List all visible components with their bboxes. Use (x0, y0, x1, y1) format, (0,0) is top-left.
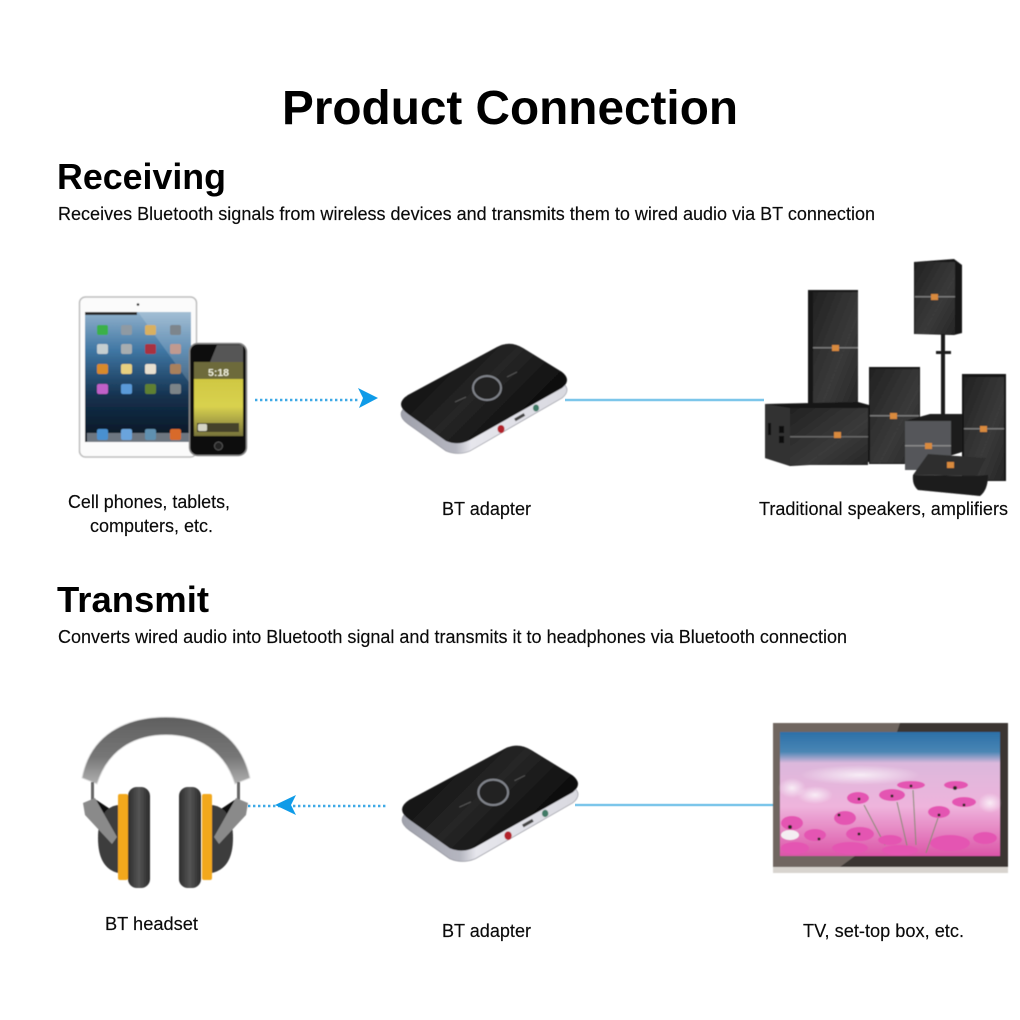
line: wired connection to speakers (565, 399, 764, 401)
left ear cup (83, 787, 150, 888)
arrow: dotted Bluetooth link to adapter (255, 388, 378, 408)
tall speaker left (808, 290, 858, 406)
text: transmit description: Converts wired audio into Bluetooth signal and transmits it to headphones via Bluetooth connection (58, 627, 847, 647)
text: receiving description: Receives Bluetooth signals from wireless devices and transmits them to wired audio via BT connection (58, 204, 875, 224)
label: BT adapter transmit: BT adapter (442, 921, 531, 941)
heading: Receiving: Receiving (57, 156, 226, 197)
icon: tablet and phone (80, 297, 246, 457)
label: speakers: Traditional speakers, amplifiers (759, 499, 1008, 519)
right ear cup (179, 787, 248, 888)
icon: speakers (765, 259, 1006, 496)
headband (82, 717, 250, 784)
label: TV: TV, set-top box, etc. (803, 921, 964, 941)
phone (190, 344, 246, 456)
icon: TV (773, 723, 1008, 873)
small grey speaker (905, 414, 962, 470)
tablet (80, 297, 196, 457)
icon: headphones (82, 717, 250, 888)
line: wired connection to TV (575, 804, 775, 806)
heading: Transmit: Transmit (57, 579, 209, 620)
TV screen (778, 732, 1002, 856)
floor monitor (913, 454, 988, 496)
title: Product Connection (282, 82, 738, 135)
mid speaker (869, 367, 920, 464)
label: computers: computers, etc. (90, 516, 213, 536)
subwoofer (765, 402, 869, 466)
phone: 5:18 (208, 367, 229, 379)
label: BT headset: BT headset (105, 914, 198, 934)
label: phones: Cell phones, tablets, (68, 492, 230, 512)
icon: BT adapter (transmit) (402, 746, 578, 861)
label: BT adapter receiving: BT adapter (442, 499, 531, 519)
speaker on pole (914, 259, 962, 420)
arrow: dotted Bluetooth link to headphones (248, 795, 386, 815)
tall speaker right (962, 374, 1006, 481)
icon: BT adapter (receiving) (401, 344, 567, 454)
